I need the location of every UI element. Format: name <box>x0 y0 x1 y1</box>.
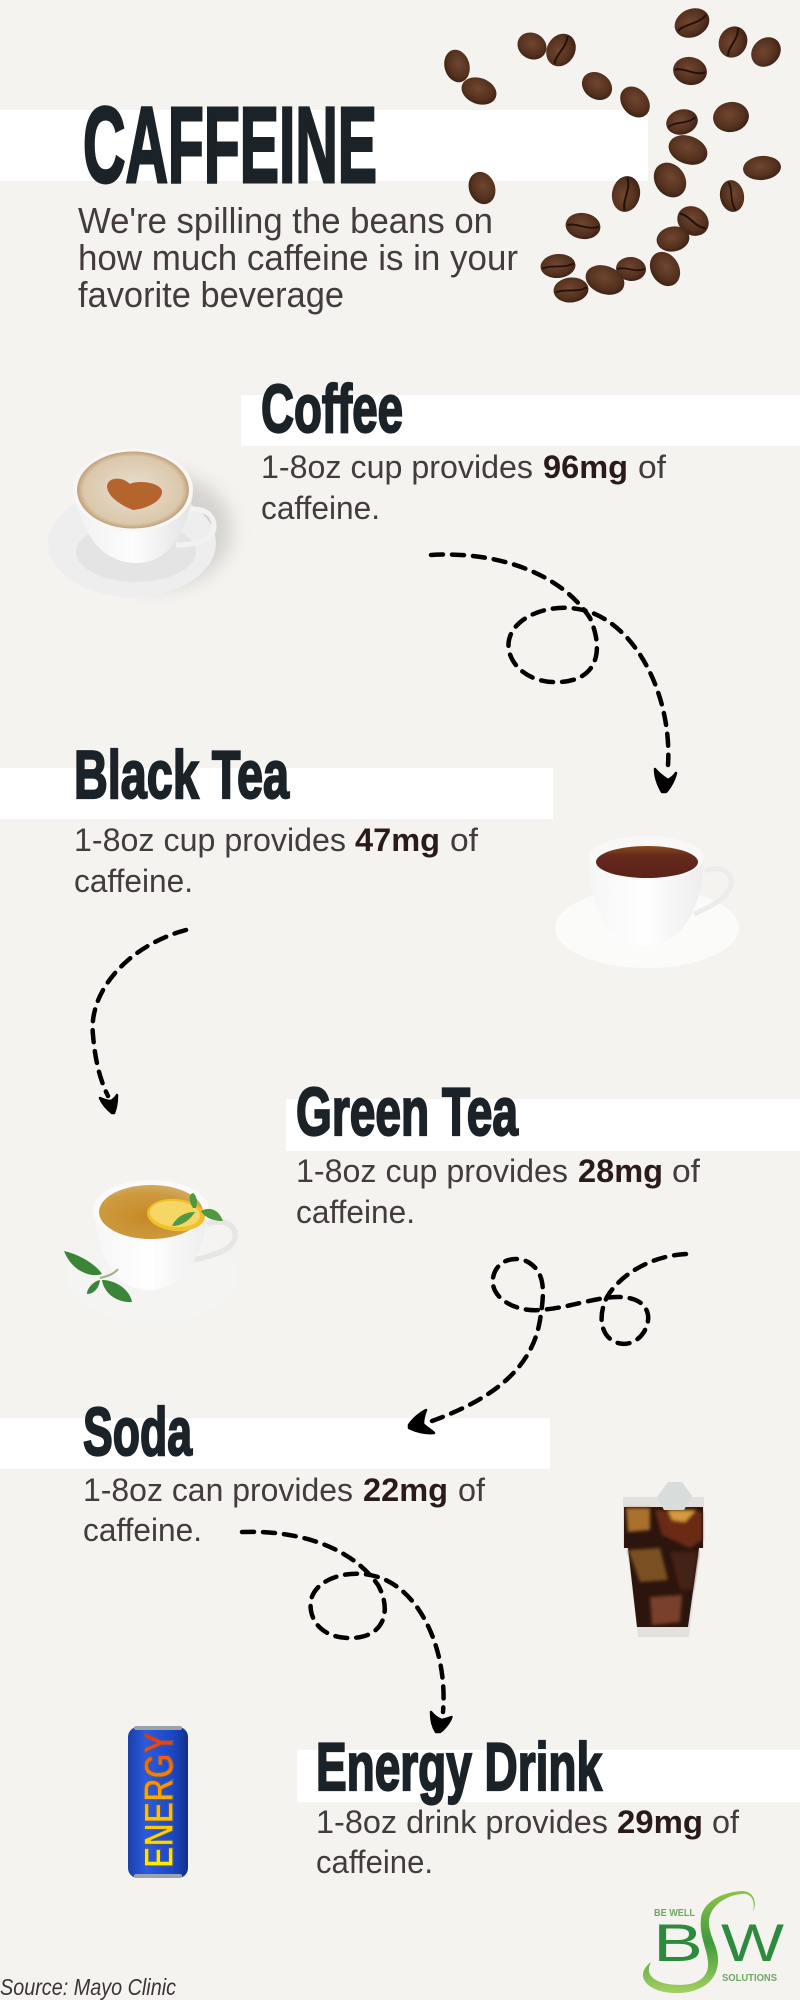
text: soda amount: 22mg <box>363 1472 448 1508</box>
text: green tea amount: caffeine. <box>296 1194 415 1230</box>
subtitle <box>78 200 518 315</box>
logo: BSW Be Well Solutions: B <box>653 1914 703 1973</box>
text: energy drink amount: 1-8oz drink provides <box>316 1804 608 1840</box>
text: black tea amount <box>74 822 478 899</box>
logo: BSW Be Well Solutions <box>643 1891 784 1993</box>
panel: soda <box>0 1394 550 1470</box>
mint sprig <box>64 1251 132 1302</box>
text: black tea amount: 1-8oz cup provides <box>74 822 346 858</box>
arrow: green tea to soda <box>409 1254 686 1433</box>
icon: energy drink can <box>128 1726 188 1878</box>
icon: glass of cola <box>623 1482 704 1637</box>
panel: green tea <box>286 1074 800 1151</box>
arrow: soda to energy drink <box>242 1532 452 1732</box>
text: soda amount: of <box>458 1472 485 1508</box>
heading: black tea: Black Tea <box>74 737 290 813</box>
arrow: black tea to green tea <box>93 930 186 1113</box>
heart <box>107 479 162 510</box>
heading: green tea: Green Tea <box>296 1074 519 1150</box>
text: coffee amount: 96mg <box>543 449 628 485</box>
heading: energy drink: Energy Drink <box>316 1729 602 1805</box>
icon: cappuccino cup <box>48 448 232 597</box>
can label: ENERGY <box>135 1732 182 1868</box>
text: green tea amount <box>296 1153 700 1230</box>
icon: green tea cup with lemon <box>64 1180 237 1322</box>
subtitle: how much caffeine is in your <box>78 237 518 278</box>
panel: coffee <box>241 371 800 447</box>
logo: BSW Be Well Solutions: BE WELL <box>654 1907 696 1919</box>
subtitle: favorite beverage <box>78 274 344 315</box>
text: energy drink amount <box>316 1804 739 1880</box>
sprig stem <box>100 1269 118 1278</box>
text: green tea amount: of <box>672 1153 700 1189</box>
panel: black tea <box>0 737 553 819</box>
text: black tea amount: 47mg <box>355 822 440 858</box>
icon: scattered coffee beans <box>441 3 787 304</box>
arrow: coffee to black tea <box>431 555 676 792</box>
text: energy drink amount: 29mg <box>617 1804 703 1840</box>
title block: CAFFEINE <box>83 84 377 205</box>
text: green tea amount: 28mg <box>578 1153 663 1189</box>
text: black tea amount: caffeine. <box>74 863 193 899</box>
mint leaves on lemon <box>172 1193 223 1226</box>
logo: BSW Be Well Solutions: SOLUTIONS <box>722 1973 777 1984</box>
text: coffee amount: of <box>638 449 666 485</box>
source note: Source: Mayo Clinic <box>0 1974 176 2000</box>
heading: soda: Soda <box>83 1394 193 1470</box>
subtitle: We're spilling the beans on <box>78 200 493 241</box>
S swoosh <box>643 1891 755 1993</box>
text: coffee amount: 1-8oz cup provides <box>261 449 533 485</box>
lemon <box>146 1197 206 1233</box>
text: soda amount: caffeine. <box>83 1512 202 1548</box>
text: soda amount <box>83 1472 485 1548</box>
text: black tea amount: of <box>450 822 478 858</box>
text: green tea amount: 1-8oz cup provides <box>296 1153 568 1189</box>
heading: coffee: Coffee <box>261 371 403 447</box>
logo: BSW Be Well Solutions: W <box>721 1914 784 1973</box>
text: energy drink amount: of <box>712 1804 739 1840</box>
text: energy drink amount: caffeine. <box>316 1844 433 1880</box>
text: coffee amount: caffeine. <box>261 490 380 526</box>
text: soda amount: 1-8oz can provides <box>83 1472 353 1508</box>
panel: energy drink <box>297 1729 800 1805</box>
text: coffee amount <box>261 449 666 526</box>
icon: black tea cup <box>555 836 739 968</box>
